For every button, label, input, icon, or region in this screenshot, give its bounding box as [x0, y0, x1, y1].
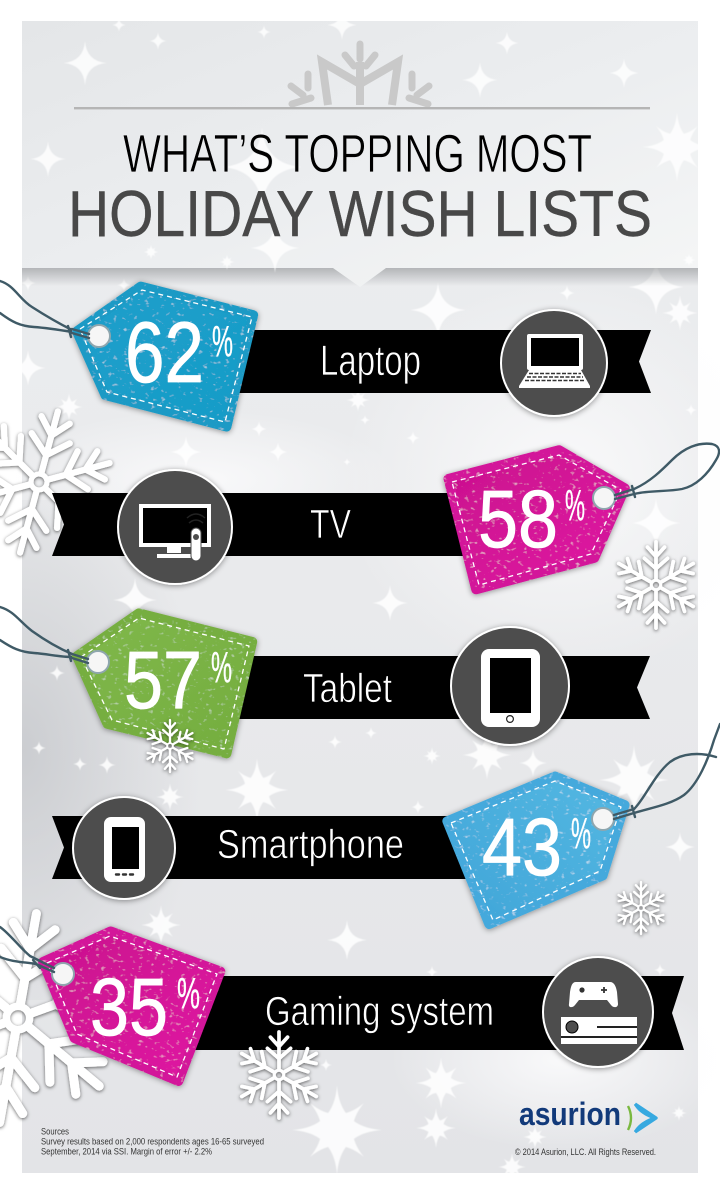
logo: asurion: asurion — [519, 1096, 621, 1132]
row: tablet — [0, 607, 650, 772]
snowflake: below 43 percent tag — [615, 882, 667, 934]
string — [0, 927, 36, 964]
snowflake: right of TV tag — [613, 542, 699, 628]
snowflake: upper left — [0, 393, 128, 571]
string — [634, 724, 720, 813]
row: gaming system — [0, 927, 684, 1118]
label: laptop: Laptop — [320, 338, 421, 385]
ribbon: smartphone — [52, 816, 480, 879]
tag: 58 percent: % — [565, 481, 585, 530]
label: smartphone: Smartphone — [217, 821, 404, 867]
icon: laptop — [501, 310, 607, 416]
title — [68, 125, 652, 250]
header panel — [22, 10, 712, 287]
tag: 58 percent: 58 — [478, 474, 558, 565]
tag: 35 percent: 35 — [90, 962, 168, 1053]
title: HOLIDAY WISH LISTS — [68, 178, 652, 250]
icon: header snowflake — [291, 44, 429, 105]
string — [0, 281, 72, 332]
tag: 57 percent: % — [211, 643, 232, 692]
string — [634, 444, 719, 494]
icon: game console — [543, 957, 653, 1067]
string — [0, 607, 72, 657]
label: TV: TV — [310, 501, 351, 547]
tag: 43 percent: % — [571, 809, 591, 858]
copyright: © 2014 Asurion, LLC. All Rights Reserved. — [515, 1147, 656, 1158]
icon: asurion arrows — [628, 1104, 656, 1132]
tag: 35 percent: % — [177, 969, 200, 1018]
tag: 62 percent — [0, 281, 253, 427]
row: TV — [52, 444, 719, 589]
ribbon: laptop — [235, 330, 651, 393]
tag: 43 percent: 43 — [482, 802, 562, 893]
icon: tablet — [451, 627, 569, 745]
ribbon: TV — [52, 493, 480, 556]
header rule — [74, 107, 650, 109]
tag: 58 percent — [448, 444, 719, 589]
tag: 62 percent: % — [212, 317, 233, 366]
ribbon: gaming system — [195, 976, 684, 1050]
tag: 57 percent — [0, 607, 252, 754]
sources note: Survey results based on 2,000 respondents ages 16-65 surveyed — [41, 1136, 264, 1148]
label: tablet: Tablet — [303, 665, 392, 711]
ribbon: tablet — [235, 656, 650, 719]
row: laptop — [0, 281, 651, 427]
row: smartphone — [52, 724, 720, 924]
tag: 35 percent — [0, 927, 220, 1081]
label: gaming system: Gaming system — [265, 988, 494, 1034]
tag: 43 percent — [447, 724, 720, 924]
tag: 57 percent: 57 — [124, 635, 202, 726]
snowflake: below gaming ribbon — [236, 1032, 322, 1118]
icon: smartphone — [73, 797, 175, 899]
snowflake: on green tag — [144, 720, 196, 772]
snowflake: large lower left — [0, 895, 141, 1141]
icon: TV — [118, 470, 232, 584]
tag: 62 percent: 62 — [125, 305, 204, 401]
sources note: Sources — [41, 1126, 69, 1138]
sources note: September, 2014 via SSI. Margin of error +/- 2.2% — [41, 1146, 212, 1158]
